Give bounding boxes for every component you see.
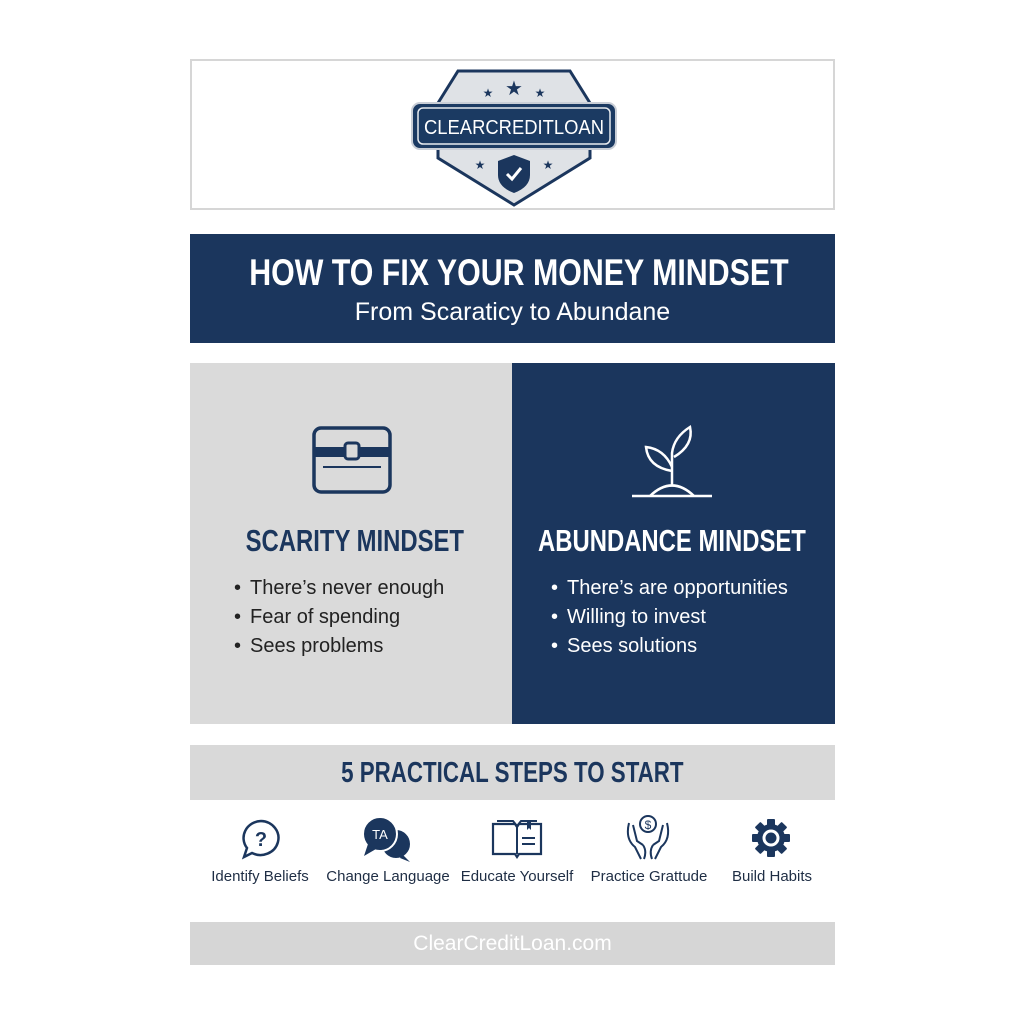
logo badge: ★ [505,78,523,100]
label: educate: Educate Yourself [461,868,573,885]
icon: chest [312,426,392,494]
bullets: Fear of spending [250,606,400,628]
icon: hands with coin [626,815,670,860]
title banner [190,234,835,343]
logo badge: ★ [535,86,545,100]
icon: speech bubbles [364,818,410,862]
logo badge [411,70,617,207]
icon: hands with coin: $ [645,818,652,832]
logo badge: CLEARCREDITLOAN [424,117,604,139]
panel: scarcity [190,363,512,724]
bullets: There’s never enough [250,577,444,599]
icon: sprout [632,425,712,498]
footer [190,922,835,965]
bullets: Sees solutions [567,635,697,657]
steps header: 5 PRACTICAL STEPS TO START [341,757,684,789]
steps header [190,745,835,800]
bullets [552,577,788,657]
label: build habits: Build Habits [732,868,812,885]
label: identify: Identify Beliefs [211,868,309,885]
logo badge: ★ [475,158,485,172]
icon: speech bubbles: TA [372,827,388,842]
bullets: Willing to invest [567,606,706,628]
heading: SCARITY MINDSET [246,523,464,558]
icon: question bubble [242,820,280,860]
icon: book [492,820,542,859]
icon: gear [752,819,790,857]
heading: ABUNDANCE MINDSET [538,523,806,558]
bullets: There’s are opportunities [567,577,788,599]
subtitle: From Scaraticy to Abundane [355,298,670,326]
icon: question bubble: ? [255,829,267,851]
title: HOW TO FIX YOUR MONEY MINDSET [249,252,789,293]
footer: ClearCreditLoan.com [413,932,612,955]
logo badge: ★ [543,158,553,172]
panel: abundance [512,363,835,724]
logo badge: ★ [483,86,493,100]
bullets [234,577,444,657]
label: change language: Change Language [326,868,450,885]
label: gratitude: Practice Grattude [591,868,707,885]
logo box [190,59,835,210]
bullets: Sees problems [250,635,383,657]
